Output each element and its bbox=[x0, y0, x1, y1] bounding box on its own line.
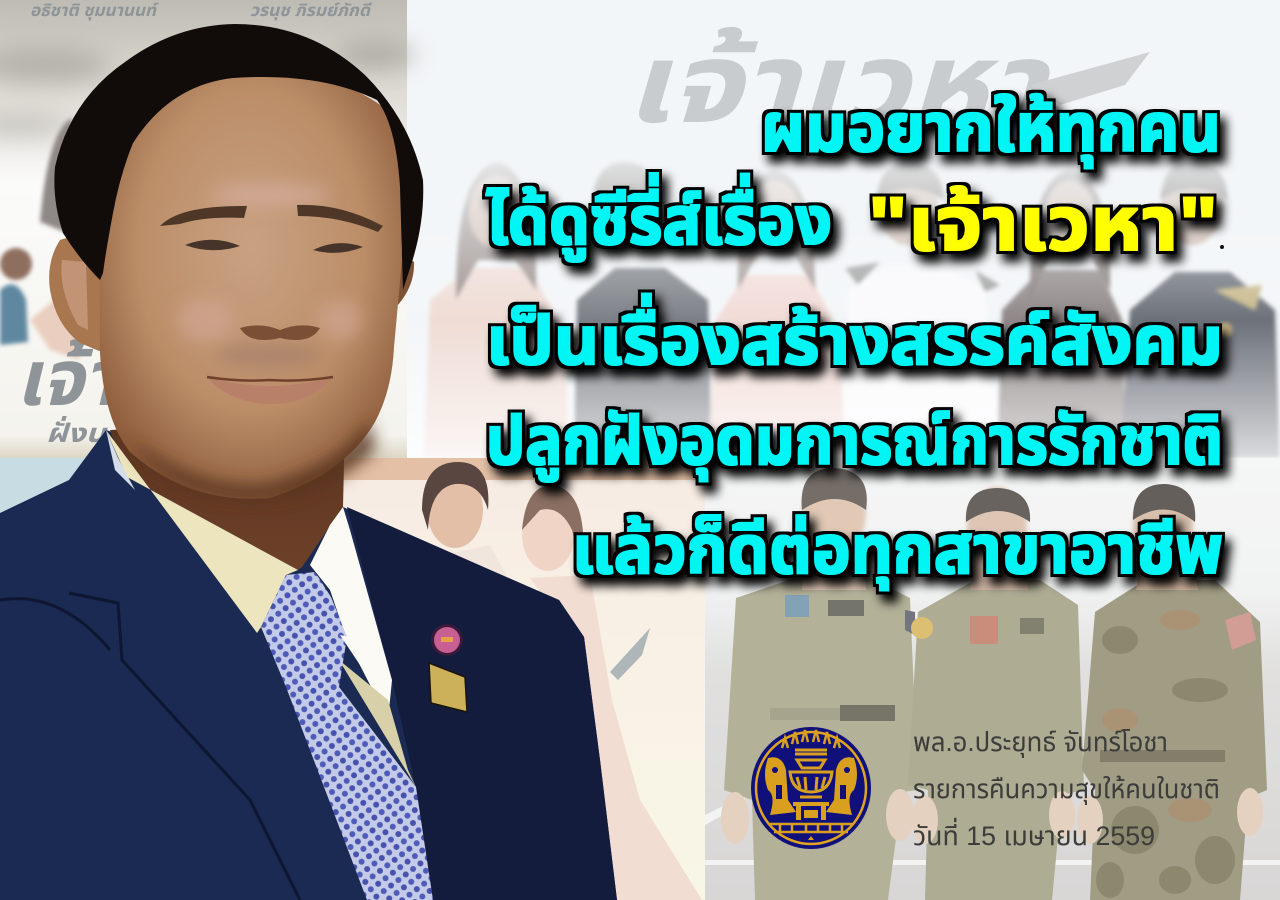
suit jacket bbox=[0, 430, 617, 900]
small black dot bbox=[1220, 245, 1224, 249]
ear left bbox=[49, 237, 104, 353]
figure: right soldier camouflage bbox=[1082, 484, 1267, 900]
faded jet bbox=[1030, 52, 1150, 105]
figure: centre pilot bbox=[908, 487, 1084, 900]
headline line 2: ได้ดูซีรี่ส์เรื่อง bbox=[486, 173, 832, 262]
attribution programme: รายการคืนความสุขให้คนในชาติ bbox=[913, 774, 1220, 805]
poster small figures bbox=[0, 118, 80, 360]
panel: top right faded series poster bbox=[407, 0, 1280, 458]
poster clouds bbox=[0, 43, 415, 135]
panel: lower left blue strip bbox=[0, 458, 345, 900]
faded couple bbox=[420, 462, 702, 900]
neck bbox=[110, 420, 345, 570]
road stripes bbox=[705, 795, 1280, 865]
collar flare bbox=[340, 635, 385, 680]
mouth bbox=[207, 377, 333, 404]
facial shading bbox=[130, 183, 375, 501]
headline line 1: ผมอยากให้ทุกคน bbox=[761, 90, 1221, 169]
figure: left pilot bbox=[724, 468, 918, 900]
poster cast names: วรนุช ภิรมย์ภักดี bbox=[250, 1, 373, 21]
neck tie bbox=[261, 572, 433, 900]
jacket lapels bbox=[0, 593, 300, 900]
text block: source attribution bbox=[913, 727, 1220, 851]
nose bbox=[240, 325, 320, 340]
faded wash over cast bbox=[407, 140, 1280, 320]
headline line 3: เป็นเรื่องสร้างสรรค์สังคม bbox=[486, 293, 1223, 379]
attribution date: วันที่ 15 เมษายน 2559 bbox=[913, 817, 1155, 851]
panel: lower middle faded poster bbox=[340, 458, 705, 900]
headline line 5: แล้วก็ดีต่อทุกสาขาอาชีพ bbox=[572, 512, 1223, 591]
icon: government seal bbox=[751, 727, 871, 849]
eyebrows bbox=[160, 205, 383, 232]
shirt right collar bbox=[310, 507, 392, 720]
headline line 4: ปลูกฝังอุดมการณ์การรักชาติ bbox=[486, 403, 1223, 482]
poster cast names: อธิชาติ ชุมนานนท์ bbox=[30, 1, 159, 21]
seal pedestal bbox=[793, 802, 829, 820]
seal bowl bbox=[790, 750, 832, 797]
seal flames bbox=[782, 730, 840, 748]
poster title: เจ้า bbox=[16, 334, 120, 422]
attribution name: พล.อ.ประยุทธ์ จันทร์โอชา bbox=[913, 727, 1168, 758]
headline highlighted series name: "เจ้าเวหา" bbox=[868, 182, 1218, 267]
panel: person portrait bbox=[0, 24, 617, 900]
white wash over the trio bbox=[705, 458, 1280, 900]
panel: top left poster bbox=[0, 0, 415, 458]
faded cast of six bbox=[424, 160, 1280, 458]
faded poster title: เจ้าเวหา bbox=[625, 21, 1051, 146]
eyes bbox=[185, 240, 363, 253]
title: headline quote bbox=[486, 90, 1223, 591]
hair bbox=[54, 24, 423, 290]
shirt left collar bbox=[106, 430, 298, 633]
pin: gold badge bbox=[429, 663, 467, 712]
panel: lower right faded flight suit trio bbox=[705, 458, 1280, 900]
poster subtitle: ฝั่งน bbox=[46, 416, 109, 448]
pin: flag badge bbox=[431, 624, 463, 656]
poster cast names bbox=[30, 1, 373, 21]
ear right bbox=[398, 250, 414, 305]
face bbox=[100, 69, 402, 499]
seal base band bbox=[768, 824, 854, 832]
hands bbox=[721, 788, 1263, 844]
faded plane bbox=[610, 628, 650, 680]
seal lions bbox=[765, 757, 857, 815]
